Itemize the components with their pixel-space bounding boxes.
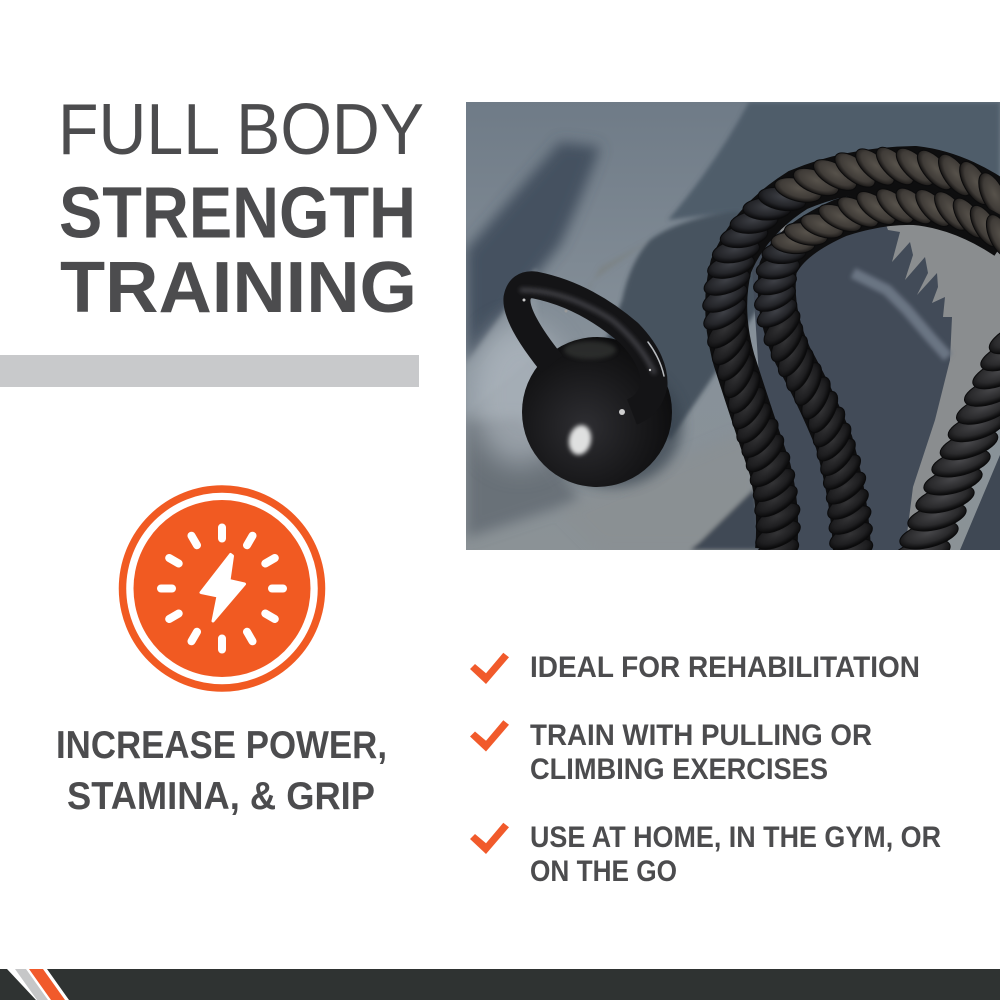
list item 3: [530, 821, 941, 888]
title line: training: TRAINING: [60, 248, 417, 328]
rope left: upper-left section: [702, 188, 805, 330]
title line: full body: FULL BODY: [58, 90, 424, 170]
list item 3: ON THE GO: [530, 855, 677, 888]
rope shadow: [750, 222, 952, 550]
rope right: [898, 332, 1000, 550]
photo: kettlebell and battle ropes: [466, 102, 1000, 572]
list item 2: CLIMBING EXERCISES: [530, 753, 828, 786]
rope middle: [758, 206, 1000, 570]
list item 2: TRAIN WITH PULLING OR: [530, 719, 872, 752]
shadow right of rope: [960, 455, 1000, 550]
rope middle: top section: [770, 188, 1000, 254]
icon: power lightning badge: [122, 489, 322, 688]
caption: increase power: INCREASE POWER,: [56, 724, 387, 767]
icon: check 2: [470, 720, 509, 752]
title: [58, 90, 424, 328]
icon: check 3: [470, 823, 509, 854]
floor inside rope loop: [780, 225, 1000, 517]
kettlebell: [517, 285, 682, 487]
caption: increase power: [56, 724, 387, 818]
title line: strength: STRENGTH: [59, 174, 416, 254]
light reflection in shadow: [853, 273, 948, 357]
rope left: [702, 167, 1000, 571]
list item 1: IDEAL FOR REHABILITATION: [530, 651, 920, 684]
light glow around kettlebell: [472, 325, 568, 465]
list item 3: USE AT HOME, IN THE GYM, OR: [530, 821, 941, 854]
rope middle: upper-left section: [753, 245, 804, 328]
grey divider bar: [0, 355, 419, 387]
footer bar with stripes: [0, 969, 1000, 1000]
caption: increase power: STAMINA, & GRIP: [67, 775, 375, 818]
list item 2: [530, 719, 872, 786]
icon: check 1: [470, 653, 509, 684]
rope left: top section: [775, 146, 1000, 215]
